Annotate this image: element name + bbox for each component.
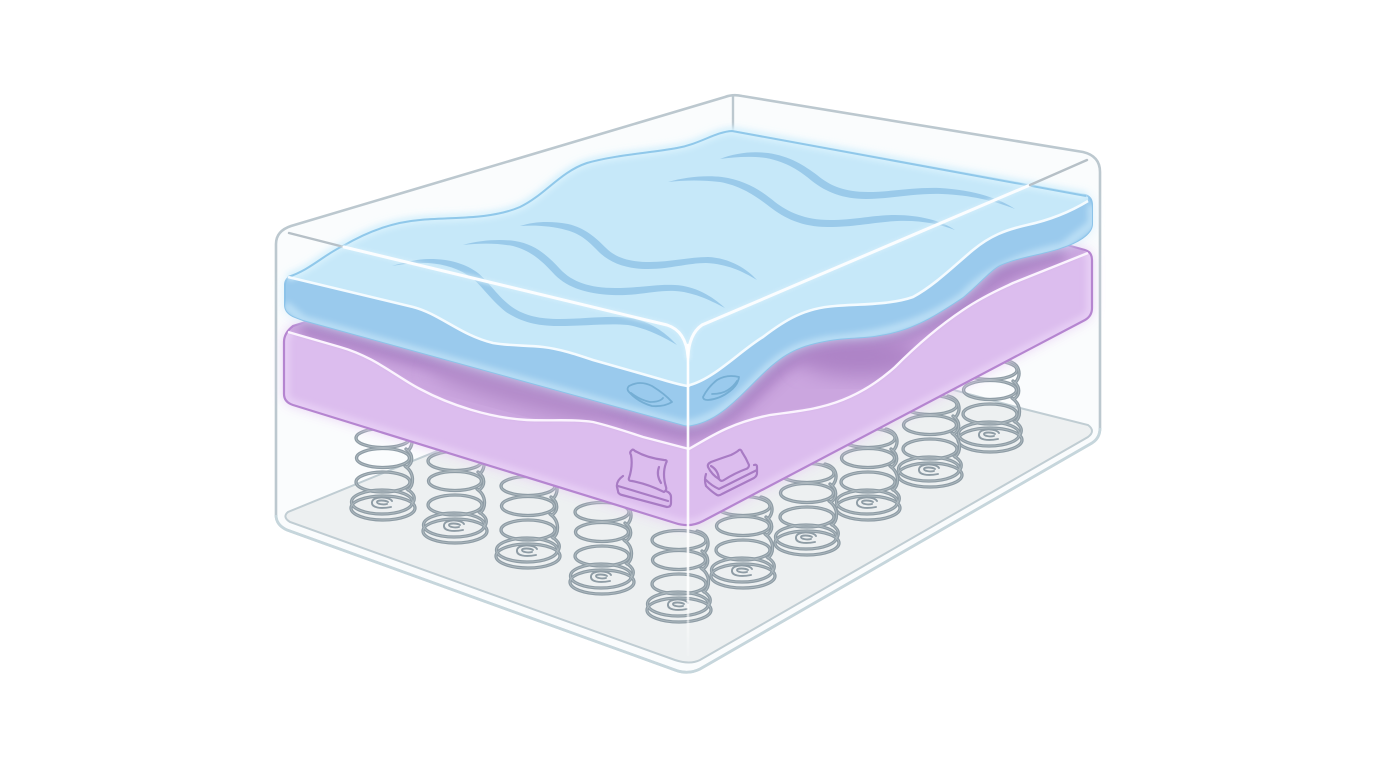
floor plate — [285, 330, 1092, 662]
illustration: layered mattress in a glass box — [274, 94, 1102, 674]
spring 5 — [647, 530, 711, 622]
blue gel layer — [285, 131, 1092, 426]
icon: pillow on foam, left face — [617, 450, 671, 507]
blue back edge outline — [288, 131, 1086, 277]
glass box front edges — [289, 160, 1087, 655]
blue top face — [288, 131, 1088, 386]
icon: pillow leaf, left face — [628, 383, 672, 406]
spring 3 — [496, 476, 560, 568]
spring 2 — [423, 452, 487, 543]
icon: pillow leaf, right face — [703, 376, 739, 400]
surface wave lines — [392, 152, 1015, 345]
purple foam layer — [284, 230, 1092, 525]
blue white highlight edge, right — [688, 201, 1088, 386]
spring 4 — [570, 502, 634, 594]
purple white highlight edge — [288, 253, 1088, 449]
glass box — [276, 95, 1100, 672]
spring 1 — [351, 428, 415, 520]
blue side face — [285, 131, 1092, 426]
spring 8 — [836, 428, 900, 520]
spring 6 — [711, 496, 775, 588]
spring 10 — [958, 360, 1022, 452]
spring row — [351, 360, 1022, 622]
spring 9 — [898, 396, 962, 487]
blue white highlight edge, front — [288, 277, 688, 386]
spring 7 — [775, 464, 839, 555]
icon: pillow on foam, right face — [705, 450, 757, 495]
